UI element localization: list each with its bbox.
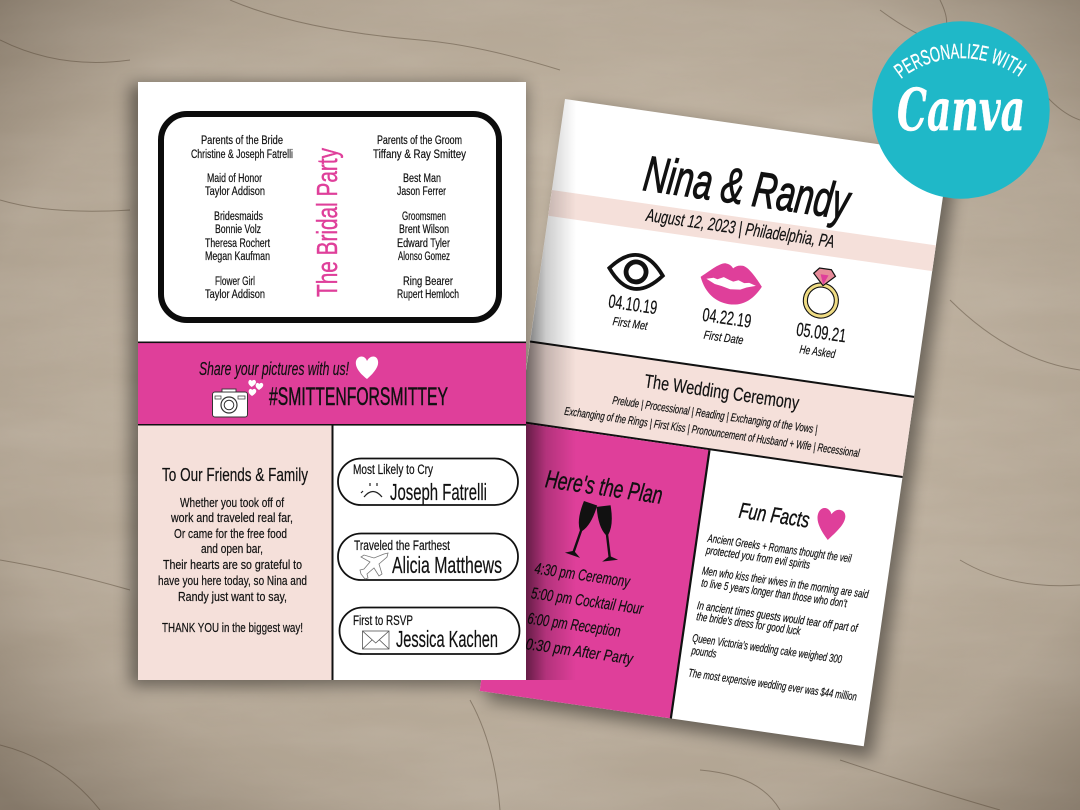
schedule: ceremony: 4:30 pm Ceremony [533, 561, 632, 591]
right card: wedding program front [480, 99, 949, 746]
thank-you message: and open bar, [201, 541, 263, 556]
fact 3: In ancient times guests would tear off part of [696, 600, 860, 635]
heading: the wedding ceremony: The Wedding Ceremony [643, 371, 801, 414]
vertical heading: the bridal party: The Bridal Party [312, 148, 344, 297]
card paper [138, 82, 526, 680]
thank-you message: Randy just want to say, [178, 589, 287, 604]
award: traveled the farthest: Traveled the Farthest [354, 538, 450, 553]
date: first date: 04.22.19 [701, 305, 753, 333]
fact 2 [699, 565, 870, 613]
icon: champagne flutes [564, 499, 626, 564]
bride side list: Maid of Honor [207, 173, 262, 185]
icon: eye [607, 251, 665, 293]
share caption: Share your pictures with us! [199, 359, 349, 379]
icon: kiss lips [697, 260, 764, 308]
award: first to rsvp [340, 608, 520, 654]
bride side list: Theresa Rochert [205, 238, 271, 250]
icon: camera with hearts [212, 380, 263, 417]
date and location: August 12, 2023 | Philadelphia, PA [644, 205, 836, 252]
fact 4 [690, 633, 843, 679]
heading: to our friends and family: To Our Friends & Family [162, 465, 308, 485]
groom side list: Best Man [403, 173, 441, 185]
milestone: first met [601, 251, 665, 334]
icon: pink heart [814, 507, 846, 542]
caption: first met: First Met [612, 314, 649, 333]
bride side list: Bonnie Volz [215, 224, 261, 236]
thank-you message: have you here today, so Nina and [158, 573, 307, 588]
award: most likely to cry: Most Likely to Cry [353, 462, 433, 477]
thank-you message: THANK YOU in the biggest way! [162, 620, 303, 635]
panel: wedding ceremony [518, 341, 914, 478]
heading: fun facts: Fun Facts [737, 498, 811, 533]
peach date band [548, 190, 936, 271]
thank-you message: Or came for the free food [174, 526, 287, 541]
award: first to rsvp: Jessica Kachen [396, 626, 498, 652]
hashtag: #SMITTENFORSMITTEY [269, 383, 448, 411]
bride side list: Christine & Joseph Fatrelli [191, 149, 293, 161]
thank-you message: Their hearts are so grateful to [163, 557, 302, 572]
groom side list: Parents of the Groom [377, 135, 462, 147]
bride side list: Bridesmaids [214, 211, 263, 223]
award: most likely to cry [338, 458, 518, 505]
shadows under cards [130, 84, 958, 758]
title: Nina and Randy: Nina & Randy [640, 145, 855, 231]
groom side list: Brent Wilson [399, 224, 449, 236]
date: first met: 04.10.19 [607, 291, 659, 319]
icon: sad face [361, 483, 382, 497]
groom side list: Tiffany & Ray Smittey [373, 149, 466, 161]
heading: here's the plan: Here's the Plan [544, 465, 664, 510]
groom side list [373, 135, 466, 301]
left card: wedding program back [138, 82, 526, 680]
shade cast by left card onto right card [526, 99, 571, 680]
panel: bridal party box [161, 114, 499, 320]
caption: first date: First Date [703, 328, 745, 347]
bride side list: Megan Kaufman [205, 251, 270, 263]
bride side list: Taylor Addison [205, 289, 265, 301]
schedule: reception: 6:00 pm Reception [526, 611, 622, 641]
badge: personalize with Canva [872, 21, 1050, 199]
icon: airplane [360, 553, 388, 579]
bride side list [191, 135, 293, 301]
fact 1: Ancient Greeks + Romans thought the veil [706, 533, 852, 566]
panel: fun facts [670, 450, 889, 744]
icon: envelope [362, 631, 389, 649]
bride side list: Flower Girl [215, 276, 255, 288]
icon: diamond ring [803, 267, 841, 318]
milestone: he asked [793, 266, 855, 362]
award: traveled the farthest: Alicia Matthews [392, 552, 502, 578]
ceremony order line 1: Prelude | Processional | Reading | Exchanging of the Vows | [612, 395, 818, 436]
schedule: cocktail hour: 5:00 pm Cocktail Hour [530, 585, 645, 618]
card paper [480, 99, 949, 746]
icon: white heart [356, 356, 378, 379]
schedule: after party: 10:30 pm After Party [518, 635, 635, 668]
date: he asked: 05.09.21 [795, 319, 847, 347]
fact 4: Queen Victoria's wedding cake weighed 300 [691, 633, 843, 666]
bride side list: Taylor Addison [205, 186, 265, 198]
caption: he asked: He Asked [799, 342, 837, 361]
thank-you message: work and traveled real far, [170, 510, 293, 525]
fact 5: The most expensive wedding ever was $44 million [687, 668, 857, 704]
award: first to rsvp: First to RSVP [353, 613, 413, 628]
fact 4: pounds [690, 645, 717, 661]
groom side list: Groomsmen [402, 211, 446, 223]
ceremony order line 2: Exchanging of the Rings | First Kiss | Pronouncement of Husband + Wife | Recessional [564, 406, 861, 460]
fact 2: to live 5 years longer than those who don't [700, 577, 848, 610]
groom side list: Rupert Hemloch [397, 289, 459, 301]
groom side list: Edward Tyler [397, 238, 450, 250]
fact 3: the bride's dress for good luck [696, 611, 802, 638]
panel: to our friends and family [138, 426, 332, 680]
groom side list: Jason Ferrer [397, 186, 446, 198]
fact 1: protected you from evil spirits [704, 545, 811, 572]
panel: share your pictures [138, 342, 526, 426]
award: most likely to cry: Joseph Fatrelli [390, 479, 487, 505]
thank-you message: Whether you took off of [180, 495, 284, 510]
thank-you message [158, 495, 307, 635]
fact 3 [695, 600, 860, 646]
badge arc text: PERSONALIZE WITH [893, 43, 1027, 79]
milestone: first date [692, 260, 764, 349]
award: traveled the farthest [338, 534, 518, 580]
bride side list: Parents of the Bride [201, 135, 283, 147]
groom side list: Alonso Gomez [398, 251, 450, 263]
groom side list: Ring Bearer [403, 276, 453, 288]
panel: here's the plan [480, 423, 709, 718]
fact 2: Men who kiss their wives in the morning are said [701, 565, 870, 601]
